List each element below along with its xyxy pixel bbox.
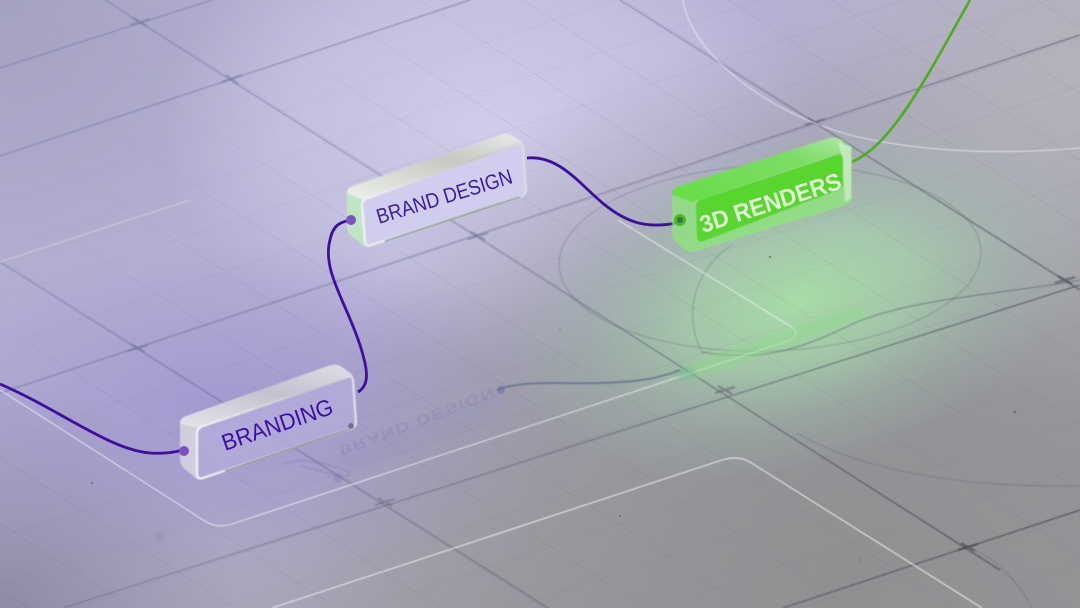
wire: Branding to Brand Design <box>328 220 366 392</box>
reflection of 3D Renders box <box>672 307 865 380</box>
box: Brand Design <box>346 134 526 247</box>
floor specks <box>91 256 1016 561</box>
3D Renders glass body <box>672 138 852 252</box>
Branding glass body <box>180 365 356 479</box>
reflection of Branding box <box>156 461 349 541</box>
dark arcs on the floor <box>556 158 1080 608</box>
Brand Design glass body <box>347 134 526 247</box>
3D Renders port <box>674 214 686 226</box>
Branding port <box>179 446 189 456</box>
Branding label: BRANDING <box>218 393 336 456</box>
box: 3D Renders <box>672 138 852 252</box>
reflected wire <box>497 370 680 390</box>
Brand Design label: BRAND DESIGN <box>374 166 515 229</box>
3D Renders label: 3D RENDERS <box>697 168 845 239</box>
wire: incoming to Branding <box>0 384 184 453</box>
Brand Design port <box>346 215 356 225</box>
wire: outgoing green <box>852 0 970 162</box>
reflection of Brand Design box: BRAND DESIGN <box>337 385 497 459</box>
box: Branding <box>179 365 356 479</box>
wire: Brand Design to 3D Renders <box>527 158 677 225</box>
